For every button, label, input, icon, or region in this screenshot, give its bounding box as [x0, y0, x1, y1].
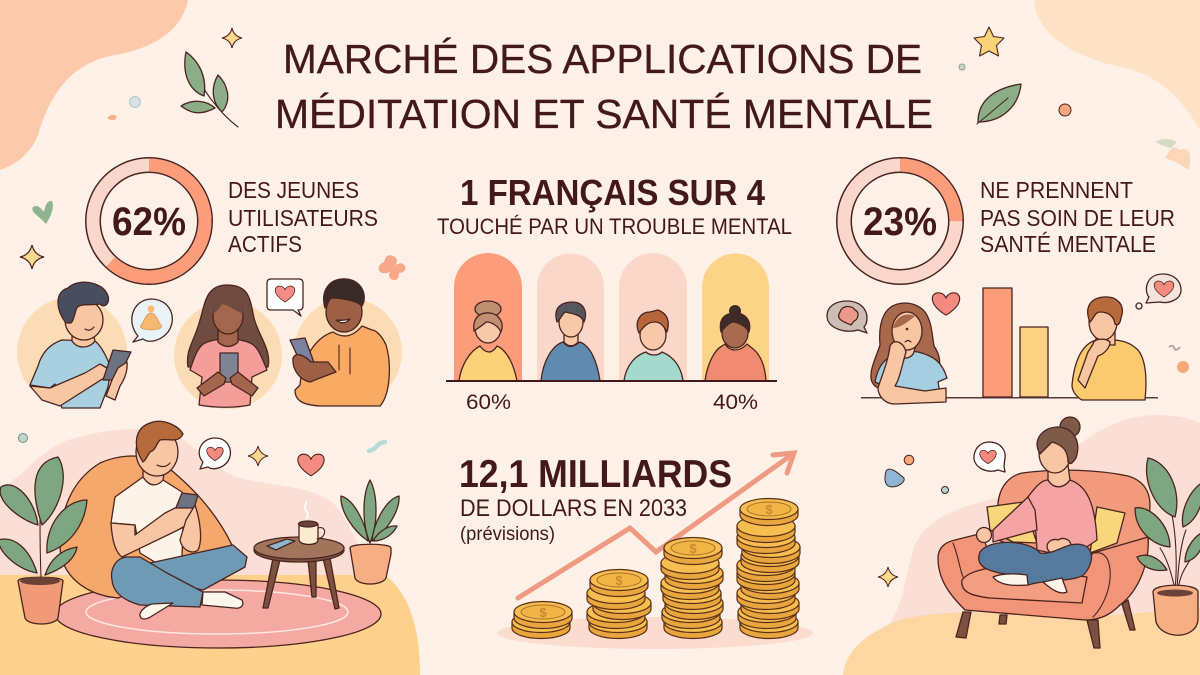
title	[275, 36, 933, 137]
text: des jeunes utilisateurs actifs: ACTIFS	[228, 231, 302, 257]
illustration: two worried people with bars	[827, 274, 1181, 404]
decorative blob: bottom left floor	[0, 575, 420, 675]
market stat: 12,1 milliards	[459, 453, 732, 545]
coin stacks	[497, 498, 813, 649]
illustration: man on bean bag	[0, 421, 399, 648]
label: 60%: 60%	[466, 391, 511, 414]
person: man in blue	[541, 302, 600, 381]
person: worried woman	[871, 303, 947, 404]
text: ne prennent pas soin de leur santé mentale: NE PRENNENT	[980, 177, 1133, 203]
stat: 23% ring: 23%	[863, 200, 937, 244]
label: 40%: 40%	[713, 391, 758, 414]
decorative: heart, star and clover left	[20, 201, 405, 280]
title: MARCHÉ DES APPLICATIONS DE	[283, 36, 922, 82]
person: meditating woman	[976, 417, 1097, 593]
stat heading: 1 français sur 4	[437, 172, 792, 239]
bubble: brain	[827, 301, 867, 333]
chart: four people in arches	[446, 253, 777, 414]
person: woman with bun	[459, 301, 517, 381]
illustration: woman meditating in armchair	[878, 417, 1200, 648]
person: man with phone	[111, 421, 247, 619]
text: des jeunes utilisateurs actifs	[228, 177, 378, 257]
stat: 62% ring	[93, 165, 205, 277]
bean bag	[60, 456, 232, 598]
illustration: three young users	[17, 279, 402, 409]
decorative dots	[18, 434, 385, 451]
chart: growth arrow	[518, 453, 794, 598]
decorative blob: bottom right floor	[843, 608, 1200, 675]
decorative blob: top right	[1034, 0, 1200, 130]
title: MÉDITATION ET SANTÉ MENTALE	[275, 91, 933, 137]
text: des jeunes utilisateurs actifs: DES JEUNES	[228, 177, 359, 203]
bubble: heart	[974, 442, 1005, 472]
plant: small right	[341, 480, 399, 584]
bubble: heart	[267, 279, 303, 316]
armchair	[938, 470, 1150, 648]
decorative shapes	[878, 455, 948, 587]
stack two: $	[615, 573, 623, 588]
user three	[290, 279, 402, 406]
stat: 23% ring	[844, 165, 956, 277]
bubble: meditation	[132, 299, 172, 342]
decorative blob: top left	[0, 0, 188, 170]
decorative icons: top left sprig and star	[107, 28, 242, 127]
decorative blob: bottom right pink	[890, 415, 1200, 640]
person: boy in teal	[624, 310, 683, 381]
text: ne prennent pas soin de leur santé mentale	[980, 177, 1175, 257]
person: woman in hoodie	[705, 305, 766, 381]
bubble: heart	[199, 438, 230, 469]
text: ne prennent pas soin de leur santé mentale: SANTÉ MENTALE	[980, 231, 1156, 257]
user two	[174, 285, 282, 409]
stack three	[661, 538, 723, 638]
stack two	[587, 570, 651, 638]
stat heading: 1 français sur 4: 1 FRANÇAIS SUR 4	[460, 172, 765, 213]
stack four: $	[765, 502, 773, 517]
user one	[17, 282, 131, 408]
stack four	[737, 498, 800, 638]
stat heading: 1 français sur 4: TOUCHÉ PAR UN TROUBLE MENTAL	[437, 214, 792, 239]
market stat: 12,1 milliards: (prévisions)	[460, 524, 555, 545]
stack one: $	[539, 605, 547, 620]
stat: 62% ring: 62%	[112, 200, 186, 244]
icon: heart	[298, 454, 324, 476]
icon: star	[248, 446, 268, 466]
text: ne prennent pas soin de leur santé mentale: PAS SOIN DE LEUR	[980, 205, 1175, 231]
market stat: 12,1 milliards: 12,1 MILLIARDS	[459, 453, 732, 496]
rug	[55, 580, 381, 648]
table with coffee and phone	[254, 501, 344, 609]
bubble: thought heart	[1136, 274, 1181, 309]
decorative icons: top right star and leaf	[959, 27, 1190, 170]
bar chart	[983, 288, 1048, 397]
stack one	[512, 602, 572, 638]
stack three: $	[689, 541, 697, 556]
decorative: squiggle and dot right	[1169, 346, 1189, 373]
icon: heart	[932, 293, 960, 315]
text: des jeunes utilisateurs actifs: UTILISATEURS	[228, 205, 378, 231]
market stat: 12,1 milliards: DE DOLLARS EN 2033	[460, 495, 687, 522]
decorative blob: bottom left pink	[0, 429, 372, 580]
plant: left	[0, 457, 87, 624]
plant: armchair side	[1135, 458, 1200, 635]
person: thoughtful man	[1072, 297, 1146, 400]
